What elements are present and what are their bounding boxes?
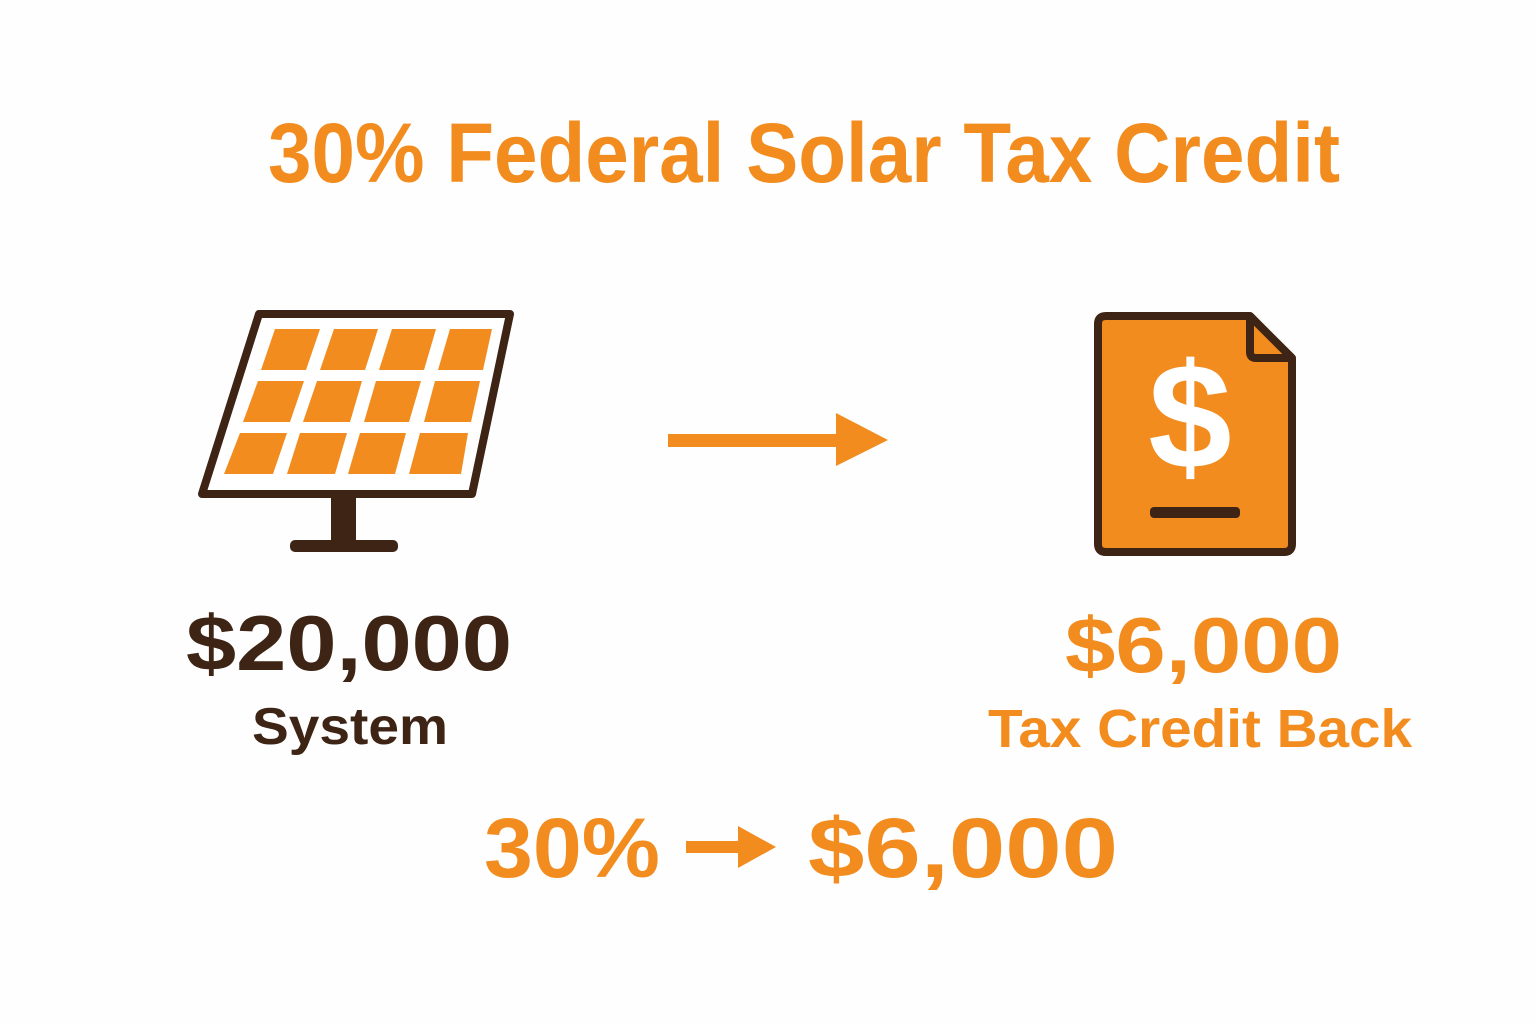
label: system cost bbox=[186, 599, 512, 756]
label: tax credit bbox=[988, 601, 1413, 759]
icon: solar panel bbox=[202, 314, 510, 552]
arrow: main bbox=[668, 413, 888, 466]
label: tax credit: Tax Credit Back bbox=[988, 699, 1413, 759]
equation: 30% to $6,000: $6,000 bbox=[808, 801, 1118, 895]
icon: tax document bbox=[1098, 316, 1292, 552]
label: tax credit: $6,000 bbox=[1065, 601, 1342, 689]
label: system cost: $20,000 bbox=[186, 599, 512, 687]
equation: 30% to $6,000: 30% bbox=[484, 801, 660, 895]
icon: tax document: $ bbox=[1148, 332, 1232, 500]
equation: 30% to $6,000 bbox=[484, 801, 1118, 895]
title: 30% Federal Solar Tax Credit bbox=[268, 106, 1340, 200]
label: system cost: System bbox=[252, 698, 448, 756]
